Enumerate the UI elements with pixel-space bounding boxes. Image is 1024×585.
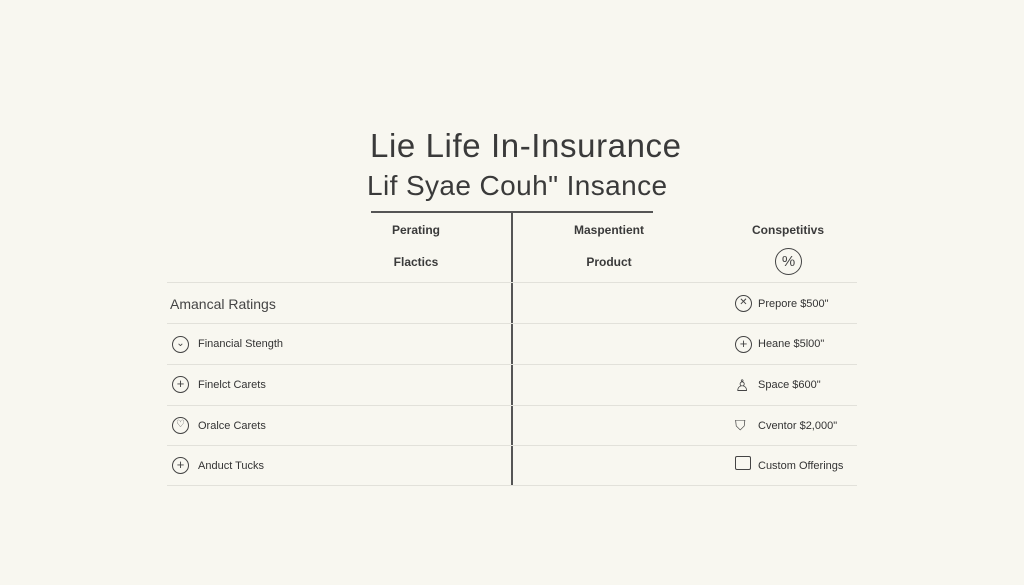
- right rows: ✕: [739, 297, 748, 308]
- left rows: +: [177, 457, 184, 472]
- left rows: ⌄: [176, 338, 185, 349]
- left rows: Oralce Carets: [198, 420, 266, 432]
- right rows: Cventor $2,000": [758, 420, 837, 432]
- left rows: ♡: [176, 419, 185, 430]
- title underline: [371, 211, 653, 212]
- text: Product: [586, 255, 632, 269]
- title: Lie Life In-Insurance: [370, 127, 682, 164]
- header: col1: Perating: [392, 223, 440, 237]
- right rows: [735, 295, 843, 472]
- right rows: Prepore $500": [758, 298, 829, 310]
- right rows: ♙: [735, 378, 749, 395]
- left rows: Anduct Tucks: [198, 460, 264, 472]
- right rows: +: [740, 336, 747, 351]
- subtitle: Lif Syae Couh" Insance: [367, 170, 667, 201]
- right rows: Custom Offerings: [758, 460, 843, 472]
- left rows: [170, 296, 283, 474]
- right rows: Space $600": [758, 379, 821, 391]
- icon: percent: [775, 248, 802, 275]
- left rows: Finelct Carets: [198, 379, 266, 391]
- header: col2: Maspentient: [574, 223, 644, 237]
- right rows: ⛉: [735, 417, 746, 433]
- left rows: +: [177, 376, 184, 391]
- right rows: Heane $5l00": [758, 338, 824, 350]
- icon: percent: %: [782, 253, 795, 270]
- text: Flactics: [394, 255, 438, 269]
- left rows: Financial Stength: [198, 338, 283, 350]
- left rows: Amancal Ratings: [170, 296, 276, 312]
- column divider: [511, 211, 512, 485]
- header: col3: Conspetitivs: [752, 223, 824, 237]
